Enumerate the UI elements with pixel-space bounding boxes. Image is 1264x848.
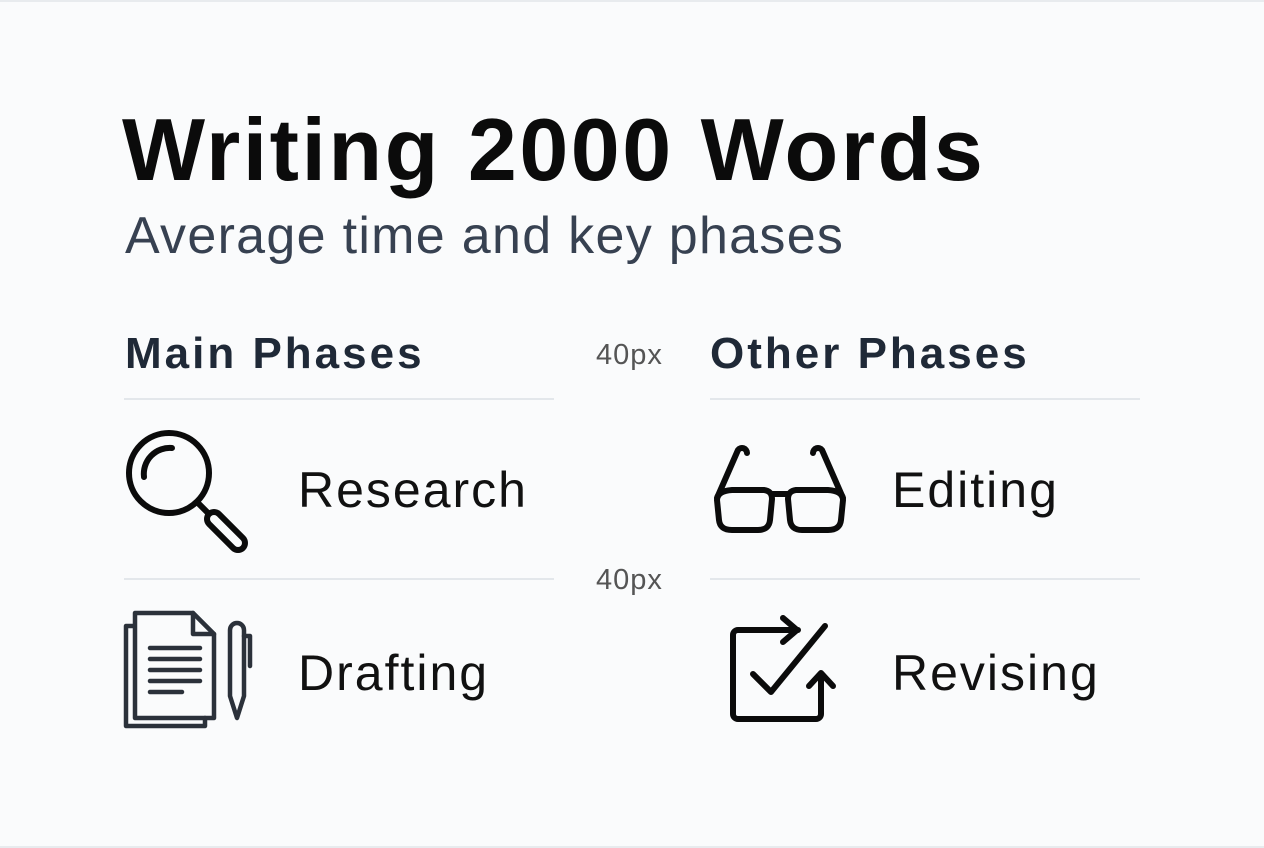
spacing label: 40px: [596, 564, 663, 596]
icon: magnifier: [126, 430, 248, 553]
subtitle: Average time and key phases: [125, 207, 844, 265]
title: Writing 2000 Words: [122, 100, 985, 199]
heading: other phases: Other Phases: [710, 329, 1030, 378]
spacing label: 40px: [596, 339, 663, 371]
heading: main phases: Main Phases: [125, 329, 425, 378]
label: editing: Editing: [892, 462, 1059, 518]
label: research: Research: [298, 462, 528, 518]
label: drafting: Drafting: [298, 645, 489, 701]
icon: documents: [124, 610, 252, 728]
icon: glasses: [714, 445, 846, 533]
label: revising: Revising: [892, 645, 1100, 701]
icon: revise: [730, 615, 836, 722]
